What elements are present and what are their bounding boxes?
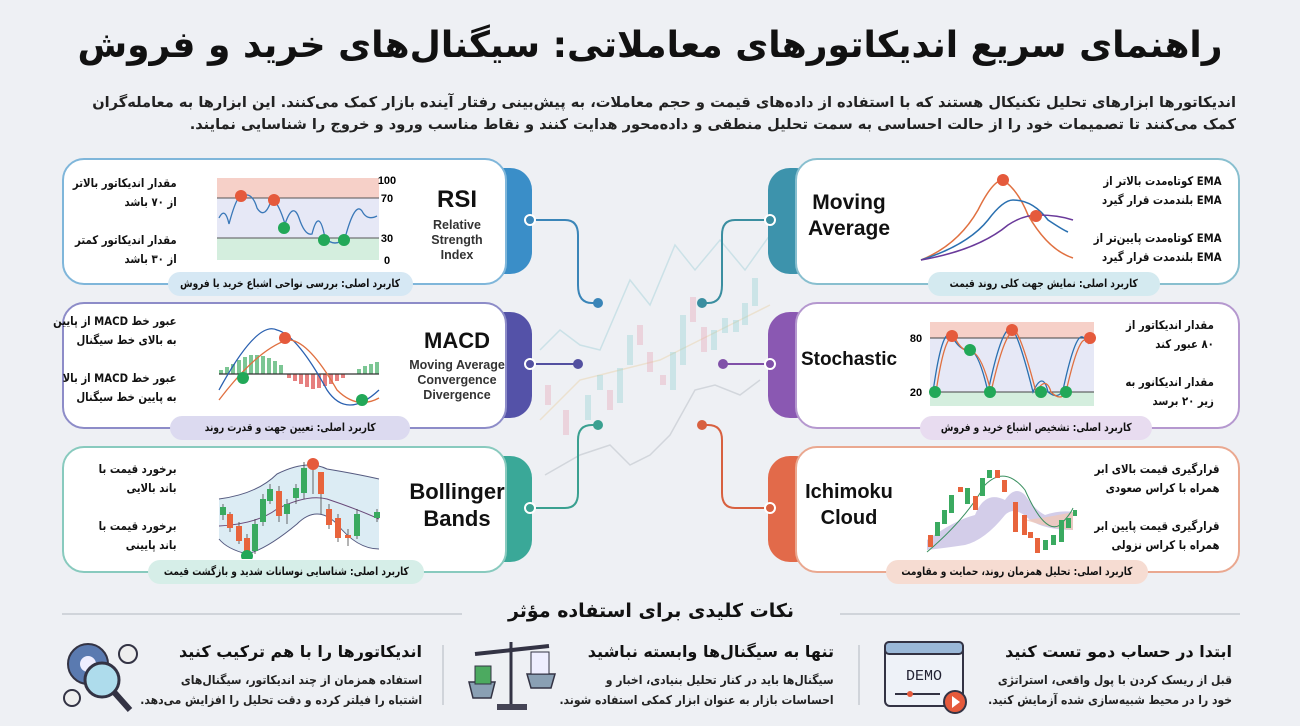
text: Bollinger signals: باند بالایی [127,481,177,495]
heading: Bollinger: Bands [423,506,491,531]
text: Stochastic signals: زیر ۲۰ برسد [1153,394,1214,408]
pill: MA use [928,272,1160,296]
icon: demo window [884,641,967,714]
pill: MACD use: کاربرد اصلی: تعیین جهت و قدرت روند [205,421,375,434]
icon: scale [468,642,556,710]
panel: MACD [54,302,536,440]
tip: not only signals: تنها به سیگنال‌ها وابسته نباشید [588,642,834,661]
heading: RSI: Relative [433,218,481,232]
text: Bollinger signals: برخورد قیمت با [99,462,177,476]
heading: Ichimoku: Cloud [821,507,877,529]
tip: combine indicators: استفاده همزمان از چند اندیکاتور، سیگنال‌های [181,673,422,687]
heading: MACD: Divergence [423,388,491,402]
tip: demo: قبل از ریسک کردن با پول واقعی، استراتژی [998,673,1232,687]
heading: RSI: Index [441,248,473,262]
pill: Ichimoku use [886,560,1148,584]
chart: Stochastic: 20 [910,387,922,399]
text: MA signals: EMA بلندمدت قرار گیرد [1102,193,1222,207]
heading: Bollinger [409,479,505,531]
tip: not only signals: احساسات بازار به عنوان ابزار کمکی استفاده شوند. [560,693,834,707]
tip: combine indicators: اندیکاتورها را با هم ترکیب کنید [179,642,422,661]
intro text [92,93,1236,133]
panel: Moving Average [764,158,1240,296]
pill: RSI use [168,272,413,296]
chart: RSI: 70 [381,193,393,205]
text: Bollinger signals: برخورد قیمت با [99,519,177,533]
icon: demo window: DEMO [906,668,942,685]
text: MA signals [1093,174,1222,264]
text: MACD signals [54,314,177,404]
tip: combine indicators [63,642,422,712]
text: Bollinger signals [99,462,177,552]
panel: Stochastic [764,302,1240,440]
connectors [530,220,770,508]
tip: combine indicators: اشتباه را فیلتر کرده و دقت تحلیل را افزایش می‌دهد. [140,693,422,707]
text: Ichimoku signals: همراه با کراس صعودی [1106,481,1220,495]
intro text: اندیکاتورها ابزارهای تحلیل تکنیکال هستند که با استفاده از داده‌های قیمت و حجم معاملات، به پیش‌بینی رفتار آینده بازار کمک می‌کنند. این ابزارها به معامله‌گران [92,94,1236,111]
heading: Bollinger: Bollinger [409,479,505,504]
text: Stochastic signals: مقدار اندیکاتور از [1126,318,1214,332]
heading: Moving Average: Average [808,217,890,240]
heading: Ichimoku: Ichimoku [805,481,893,503]
chart: MACD [218,328,380,406]
text: Stochastic signals: مقدار اندیکانور به [1126,375,1214,389]
heading: RSI: Strength [431,233,483,247]
pill: MA use: کاربرد اصلی: نمایش جهت کلی روند قیمت [950,277,1138,290]
tip: not only signals: سیگنال‌ها باید در کنار تحلیل بنیادی، اخبار و [606,673,834,687]
heading: Moving Average [808,191,890,240]
title: راهنمای سریع اندیکاتورهای معاملاتی: سیگنال‌های خرید و فروش [77,25,1222,66]
chart: RSI: 30 [381,233,393,245]
heading: RSI: RSI [437,186,477,213]
text: Bollinger signals: باند پایینی [126,538,177,552]
text: Stochastic signals [1126,318,1214,408]
panel: Bollinger [62,446,536,584]
chart: Moving Average [920,174,1074,261]
tip: demo: خود را در محیط شبیه‌سازی شده آزمایش کنید. [988,693,1232,707]
heading: MACD: Moving Average [409,358,505,372]
text: RSI signals [72,176,177,266]
chart: RSI [217,176,396,266]
panel: RSI [62,158,536,296]
intro text: کمک می‌کنند تا تصمیمات خود را از حالت احساسی به سمت تحلیل منطقی و داده‌محور هدایت کنند و نقاط مناسب ورود و خروج را شناسایی نمایند. [190,116,1236,133]
heading: Moving Average: Moving [812,191,886,214]
text: RSI signals: مقدار اندیکاتور کمتر [75,233,177,247]
text: Stochastic signals: ۸۰ عبور کند [1155,337,1214,351]
text: MA signals: EMA بلندمدت قرار گیرد [1102,250,1222,264]
panel: Ichimoku [764,446,1240,584]
icon: gears and magnifier [63,643,138,712]
text: RSI signals: از ۷۰ باشد [125,195,177,209]
text: MACD signals: عبور خط MACD از پایین [54,314,177,328]
chart: Ichimoku [926,470,1077,553]
pill: Ichimoku use: کاربرد اصلی: تحلیل همزمان روند، حمایت و مقاومت [901,565,1133,578]
chart: Bollinger [218,458,380,559]
chart: Stochastic: 80 [910,333,922,345]
text: Ichimoku signals: همراه با کراس نزولی [1112,538,1220,552]
tip: not only signals [468,642,834,710]
pill: Bollinger use: کاربرد اصلی: شناسایی نوسانات شدید و بازگشت قیمت [164,565,408,578]
heading: RSI [431,186,483,262]
tip: demo [884,641,1232,714]
heading: MACD: MACD [424,328,490,353]
heading: key tips: نکات کلیدی برای استفاده مؤثر [508,600,794,622]
pill: Stochastic use [920,416,1152,440]
pill: Bollinger use [148,560,424,584]
heading: Stochastic: Stochastic [801,349,897,370]
text: Ichimoku signals: قرارگیری قیمت پایین ابر [1095,519,1220,533]
pill: RSI use: کاربرد اصلی: بررسی نواحی اشباع خرید یا فروش [181,277,400,290]
text: Ichimoku signals [1094,462,1220,552]
text: RSI signals: از ۳۰ باشد [125,252,177,266]
pill: MACD use [170,416,410,440]
text: MA signals: EMA کوتاه‌مدت پایین‌تر از [1094,231,1222,245]
text: RSI signals: مقدار اندیکاتور بالاتر [73,176,177,190]
tip: demo: ابتدا در حساب دمو تست کنید [1005,642,1232,661]
text: MACD signals: عبور خط MACD از بالا [63,371,177,385]
text: MACD signals: به پایین خط سیگنال [77,390,177,404]
heading: MACD: Convergence [417,373,497,387]
heading: Ichimoku [805,481,893,529]
pill: Stochastic use: کاربرد اصلی: تشخیص اشباع خرید و فروش [941,421,1131,434]
heading: MACD [409,328,505,402]
text: MACD signals: به بالای خط سیگنال [77,333,177,347]
chart: Stochastic [910,322,1096,406]
text: Ichimoku signals: قرارگیری قیمت بالای ابر [1095,462,1220,476]
text: MA signals: EMA کوتاه‌مدت بالاتر از [1104,174,1222,188]
